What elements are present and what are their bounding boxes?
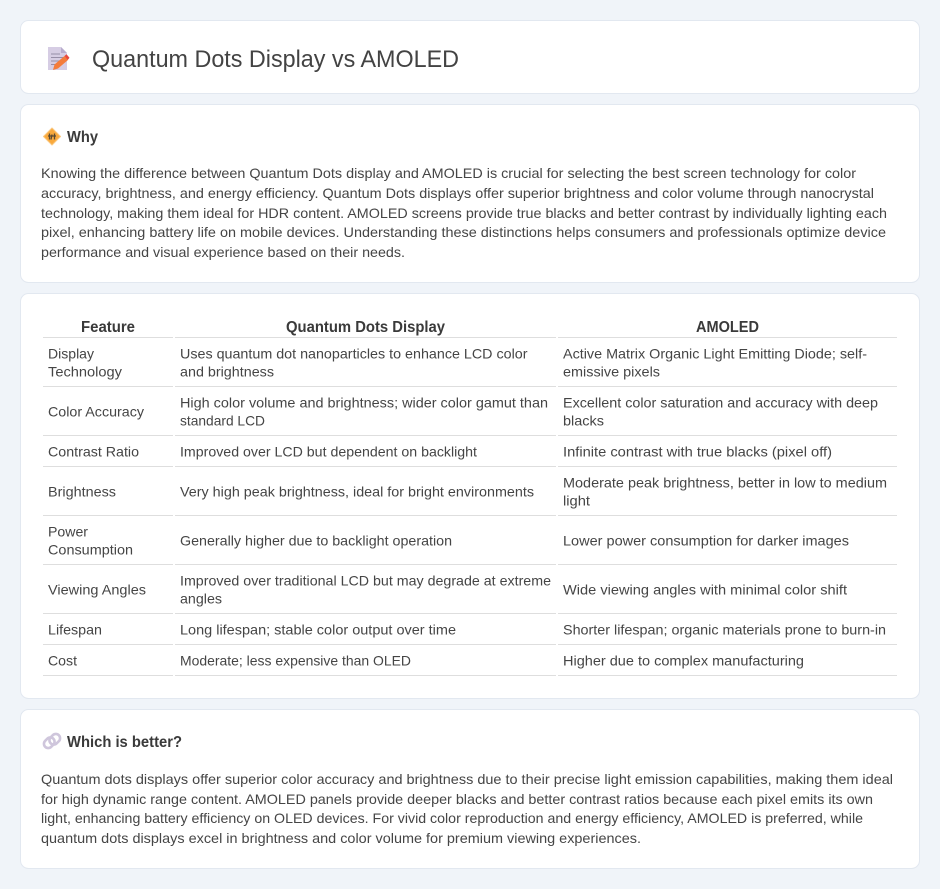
row: display technology: emissive pixels	[563, 364, 660, 380]
text block: which is better paragraph: light, enhancing battery efficiency on OLED devices. For vivid color reproduction and energy efficiency, AMOLED is preferred, while	[41, 810, 863, 826]
row: contrast ratio: Improved over LCD but dependent on backlight	[180, 444, 477, 460]
row: cost: Cost	[48, 652, 77, 668]
table header row: Quantum Dots Display	[286, 319, 445, 336]
row: power consumption	[48, 524, 849, 558]
row: display technology: and brightness	[180, 364, 274, 380]
row: color accuracy: Color Accuracy	[48, 404, 144, 420]
row: power consumption: Generally higher due to backlight operation	[180, 532, 452, 548]
row: power consumption: Consumption	[48, 542, 133, 558]
row: contrast ratio: Contrast Ratio	[48, 444, 139, 460]
heading: which is better: Which is better?	[67, 734, 182, 751]
row: color accuracy: standard LCD	[180, 412, 265, 428]
row: color accuracy	[48, 394, 878, 428]
text block: which is better paragraph: for high dynamic range content. AMOLED panels provide deeper blacks and better contrast ratios because each pixel emits its own	[41, 791, 873, 807]
text block: why paragraph: pixel, enhancing battery life on mobile devices. Understanding these distinctions helps consumers and professionals optimize device	[41, 224, 886, 240]
row: lifespan: Shorter lifespan; organic materials prone to burn-in	[563, 622, 886, 638]
row: cost	[48, 652, 804, 668]
row: contrast ratio: Infinite contrast with true blacks (pixel off)	[563, 444, 832, 460]
text block: why paragraph	[41, 165, 887, 260]
row: brightness	[48, 474, 887, 508]
row: brightness: light	[563, 492, 590, 508]
row: color accuracy: Excellent color saturation and accuracy with deep	[563, 394, 878, 410]
row: viewing angles	[48, 572, 847, 606]
text block: why paragraph: Knowing the difference between Quantum Dots display and AMOLED is crucial for selecting the best screen technology for color	[41, 165, 856, 181]
row: viewing angles: Wide viewing angles with minimal color shift	[563, 582, 847, 598]
row: brightness: Brightness	[48, 484, 116, 500]
row: display technology: Uses quantum dot nanoparticles to enhance LCD color	[180, 346, 528, 362]
row: display technology: Active Matrix Organic Light Emitting Diode; self-	[563, 346, 867, 362]
panel: why	[20, 104, 920, 282]
row: power consumption: Lower power consumption for darker images	[563, 532, 849, 548]
text block: which is better paragraph: quantum dots displays excel in brightness and color volume for premium viewing experiences.	[41, 830, 641, 846]
row: lifespan: Long lifespan; stable color output over time	[180, 622, 456, 638]
heading: why: Why	[67, 129, 98, 146]
table header row	[81, 319, 759, 336]
panel: title card	[20, 20, 920, 94]
row: brightness: Moderate peak brightness, better in low to medium	[563, 474, 887, 490]
row: display technology: Technology	[48, 364, 122, 380]
panel: comparison table	[20, 294, 920, 698]
row: color accuracy: blacks	[563, 412, 604, 428]
icon: children crossing diamond	[44, 128, 60, 145]
icon: memo with pencil	[48, 47, 70, 70]
text block: why paragraph: performance and visual experience based on their needs.	[41, 244, 405, 260]
row: power consumption: Power	[48, 524, 88, 540]
row: lifespan	[48, 622, 886, 638]
title: Quantum Dots Display vs AMOLED	[92, 46, 459, 73]
row: viewing angles: Viewing Angles	[48, 582, 146, 598]
row: contrast ratio	[48, 444, 832, 460]
row: viewing angles: angles	[180, 590, 222, 606]
text block: why paragraph: accuracy, brightness, and energy efficiency. Quantum Dots displays offer superior brightness and color volume through nanocrystal	[41, 185, 874, 201]
row: viewing angles: Improved over traditional LCD but may degrade at extreme	[180, 572, 551, 588]
row: color accuracy: High color volume and brightness; wider color gamut than	[180, 394, 548, 410]
row: cost: Moderate; less expensive than OLED	[180, 652, 411, 668]
panel: which is better	[20, 710, 920, 868]
table header row: AMOLED	[696, 319, 759, 336]
row: brightness: Very high peak brightness, ideal for bright environments	[180, 484, 534, 500]
text block: why paragraph: technology, making them ideal for HDR content. AMOLED screens provide true blacks and better contrast by individually lighting each	[41, 205, 887, 221]
text block: which is better paragraph	[41, 771, 893, 846]
row: lifespan: Lifespan	[48, 622, 102, 638]
row: display technology	[48, 346, 867, 380]
icon: link	[42, 732, 62, 750]
text block: which is better paragraph: Quantum dots displays offer superior color accuracy and brightness due to their precise light emission capabilities, making them ideal	[41, 771, 893, 787]
table header row: Feature	[81, 319, 135, 336]
row: cost: Higher due to complex manufacturing	[563, 652, 804, 668]
row: display technology: Display	[48, 346, 94, 362]
